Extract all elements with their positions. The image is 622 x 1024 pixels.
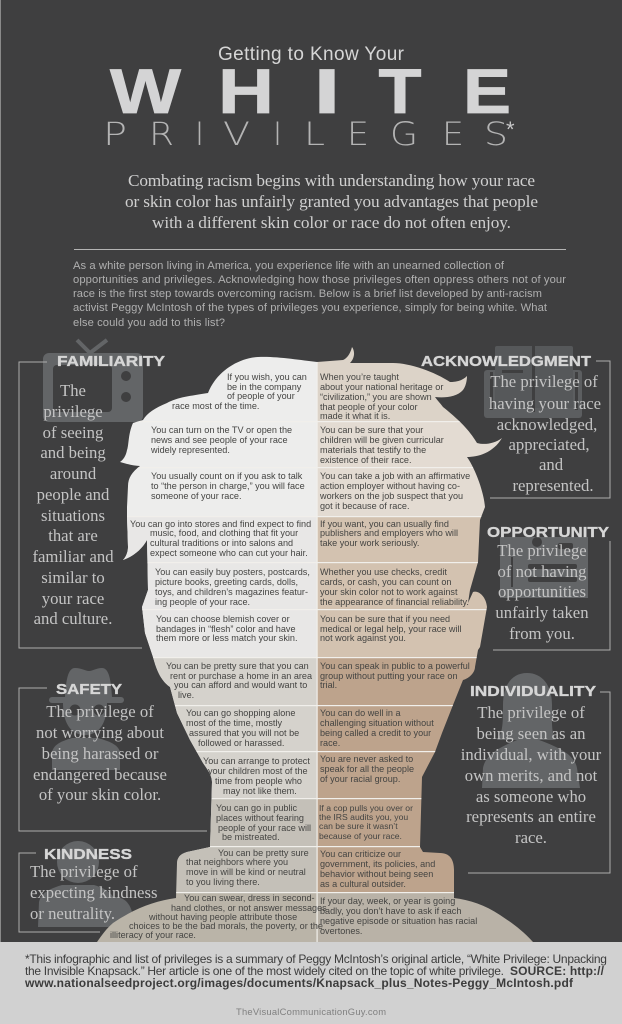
panel: right column privileges: Whether you use checks, credit <box>320 567 447 577</box>
panel: left column privileges: bandages in “flesh” color and have <box>156 624 296 634</box>
panel: opportunity: of not having <box>498 562 587 581</box>
footnote: SOURCE: http:// <box>510 964 605 978</box>
panel: familiarity: situations <box>41 506 105 525</box>
panel: right column privileges: got it because of race. <box>320 501 409 511</box>
footer band <box>0 942 622 1024</box>
title: PRIVILEGES: G <box>390 115 418 153</box>
panel: kindness: The privilege of <box>30 862 138 881</box>
panel: left column privileges: that neighbors where you <box>186 857 288 867</box>
panel: right column privileges: overtones. <box>320 926 362 936</box>
lead statement <box>125 171 538 232</box>
title: PRIVILEGES: V <box>223 115 250 153</box>
panel: acknowledgment: and <box>539 455 564 474</box>
panel: right column privileges: can be sure it wasn’t <box>319 821 398 831</box>
panel: right column privileges: as a cultural outsider. <box>320 879 406 889</box>
panel: individuality: INDIVIDUALITY <box>470 683 596 700</box>
panel: acknowledgment: represented. <box>512 476 594 495</box>
panel: familiarity: your race <box>42 589 104 608</box>
panel: individuality: represents an entire <box>466 807 596 826</box>
panel: opportunity: unfairly taken <box>495 603 589 622</box>
panel: left column privileges: be mistreated. <box>222 832 280 842</box>
panel: left column privileges: You can arrange to protect <box>203 756 310 766</box>
icon: open book <box>484 346 582 418</box>
panel: left column privileges: If you wish, you can <box>227 372 307 382</box>
panel: acknowledgment <box>421 353 610 498</box>
panel: left column privileges: You can be pretty sure that you can <box>166 661 309 671</box>
heading: Getting to Know Your: Getting to Know Your <box>218 44 405 65</box>
panel: right column privileges: speak for all the people <box>320 764 414 774</box>
panel: left column privileges: race most of the time. <box>172 401 259 411</box>
panel: left column privileges: your children most of the <box>208 766 308 776</box>
icon: television <box>43 340 143 422</box>
panel: right column privileges: You can take a job with an affirmative <box>320 471 470 481</box>
title: PRIVILEGES: * <box>506 117 515 142</box>
panel: individuality: individual, with your <box>461 745 602 764</box>
panel: right column privileges: take your work seriously. <box>320 538 419 548</box>
panel: familiarity: around <box>50 464 97 483</box>
panel: familiarity: FAMILIARITY <box>57 353 165 370</box>
intro paragraph: activist Peggy McIntosh of the types of privileges you experience, simply for being white. What <box>73 302 548 314</box>
panel: safety: The privilege of <box>46 702 154 721</box>
panel: left column privileges: may not like them. <box>223 786 297 796</box>
panel: left column privileges: ing people of your race. <box>155 597 250 607</box>
panel: left column privileges: news and see people of your race <box>151 435 288 445</box>
panel: individuality: The privilege of <box>477 703 585 722</box>
panel: left column privileges: rent or purchase a home in an area <box>170 671 313 681</box>
panel: right column privileges: You can be sure that if you need <box>320 614 450 624</box>
intro paragraph: opportunities and privileges. Acknowledging how those privileges often oppress others not of your <box>73 274 566 286</box>
credit: TheVisualCommunicationGuy.com <box>236 1006 386 1017</box>
panel: right column privileges: children will be given curricular <box>320 435 444 445</box>
panel: left column privileges: You can go into stores and find expect to find <box>130 519 311 529</box>
panel: safety: of your skin color. <box>39 785 161 804</box>
panel: left column privileges: picture books, greeting cards, dolls, <box>155 577 298 587</box>
panel: safety: being harassed or <box>42 744 159 763</box>
panel: familiarity: and being <box>40 443 106 462</box>
panel: right column privileges: negative episode or situation has racial <box>320 916 477 926</box>
panel: right column privileges: You can criticize our <box>320 849 401 859</box>
panel: right column privileges: group without putting your race on <box>320 671 458 681</box>
panel: left column privileges: You can be pretty sure <box>218 848 309 858</box>
panel: right column privileges: publishers and employers who will <box>320 528 458 538</box>
icon: woman <box>482 673 580 788</box>
panel: right column privileges: the appearance of financial reliability. <box>320 597 469 607</box>
panel: familiarity <box>19 353 165 648</box>
panel: right column privileges: behavior without being seen <box>320 869 433 879</box>
panel: right column privileges: materials that testify to the <box>320 445 426 455</box>
footnote: *This infographic and list of privileges is a summary of Peggy McIntosh’s original article, “White Privilege: Unpacking <box>25 952 607 966</box>
panel: left column privileges: to “the person in charge,” you will face <box>151 481 305 491</box>
panel: left column privileges: you can afford and would want to <box>174 680 307 690</box>
intro paragraph: race is the first step towards overcoming racism. Below is a brief list developed by anti-racism <box>73 288 542 300</box>
title: WHITE: H <box>218 57 274 127</box>
title: PRIVILEGES: R <box>149 115 174 153</box>
panel: individuality: as someone who <box>476 787 586 806</box>
divider <box>74 249 566 250</box>
panel: left column privileges: toys, and children’s magazines featur- <box>155 587 308 597</box>
lead statement: with a different skin color or race do not often enjoy. <box>152 213 511 232</box>
panel: left column privileges: most of the time, mostly <box>186 718 282 728</box>
panel: kindness <box>19 846 157 932</box>
panel: right column privileges: If you want, you can usually find <box>320 519 449 529</box>
panel: left column privileges: You usually count on if you ask to talk <box>151 471 303 481</box>
panel: left column privileges: widely represented. <box>150 445 230 455</box>
panel: left column privileges: people of your race will <box>218 823 311 833</box>
panel: left column privileges: them more or less match your skin. <box>156 633 298 643</box>
panel: left column privileges: hand clothes, or not answer messages <box>171 903 327 913</box>
title: WHITE: W <box>110 57 182 127</box>
panel: familiarity: The <box>60 381 86 400</box>
title: PRIVILEGES: I <box>273 115 282 153</box>
silhouette: head and shoulders bands <box>90 340 550 942</box>
panel: right column privileges: race. <box>320 738 340 748</box>
panel: left column privileges: to you living there. <box>186 877 260 887</box>
title: PRIVILEGES: I <box>195 115 204 153</box>
panel: individuality: own merits, and not <box>465 766 598 785</box>
panel: familiarity: of seeing <box>43 423 104 442</box>
panel: safety <box>19 681 207 831</box>
panel: safety: endangered because <box>33 765 167 784</box>
panel: safety: not worrying about <box>36 723 164 742</box>
panel: left column privileges: move in will be kind or neutral <box>186 867 306 877</box>
panel: kindness: or neutrality. <box>30 904 115 923</box>
panel: left column privileges: someone of your race. <box>151 491 241 501</box>
title: WHITE: E <box>463 57 511 127</box>
panel: right column privileges: workers on the job suspect that you <box>319 491 463 501</box>
panel: right column privileges: not work against you. <box>320 633 406 643</box>
panel: right column privileges: made it what it is. <box>320 411 390 421</box>
lead statement: or skin color has unfairly granted you advantages that people <box>125 192 538 211</box>
panel: acknowledgment: The privilege of <box>490 372 598 391</box>
panel: right column privileges: because of your race. <box>319 831 402 841</box>
title: WHITE: T <box>378 57 422 127</box>
title: PRIVILEGES: E <box>442 115 464 153</box>
panel: right column privileges: government, its policies, and <box>320 859 435 869</box>
lead statement: Combating racism begins with understanding how your race <box>128 171 535 190</box>
panel: opportunity: OPPORTUNITY <box>487 524 609 541</box>
panel: left column privileges: You can easily buy posters, postcards, <box>155 567 310 577</box>
panel: familiarity: similar to <box>41 568 105 587</box>
panel: individuality: race. <box>515 828 547 847</box>
title: WHITE <box>110 57 511 127</box>
panel: opportunity <box>487 524 610 650</box>
panel: left column privileges: You can swear, dress in second- <box>184 893 315 903</box>
panel: kindness: KINDNESS <box>44 846 132 863</box>
intro paragraph: As a white person living in America, you experience life with an unearned collection of <box>73 260 505 272</box>
icon: man in hat <box>49 668 124 770</box>
panel: acknowledgment: acknowledged, <box>497 415 597 434</box>
panel: right column privileges: of your racial group. <box>320 774 400 784</box>
panel: left column privileges: without having people attribute those <box>148 912 297 922</box>
panel: opportunity: opportunities <box>498 582 586 601</box>
panel: familiarity: and culture. <box>34 609 112 628</box>
title: PRIVILEGES: S <box>484 115 508 153</box>
panel: familiarity: familiar and <box>32 547 114 566</box>
panel: left column privileges: places without fearing <box>216 813 304 823</box>
title: WHITE: I <box>314 57 340 127</box>
panel: right column privileges: “civilization,” you are shown <box>320 392 432 402</box>
panel: safety: SAFETY <box>56 681 122 698</box>
panel: left column privileges: illiteracy of your race. <box>110 930 196 940</box>
panel: left column privileges: of people of your <box>227 391 295 401</box>
panel: right column privileges: You are never asked to <box>320 754 413 764</box>
panel: right column privileges: medical or legal help, your race will <box>320 624 462 634</box>
panel: right column privileges <box>319 372 477 936</box>
panel: left column privileges: You can go in public <box>216 803 298 813</box>
panel: right column privileges: badly, you don’t have to ask if each <box>320 906 461 916</box>
panel: acknowledgment: ACKNOWLEDGMENT <box>421 353 591 370</box>
panel: acknowledgment: appreciated, <box>508 435 590 454</box>
intro paragraph <box>73 260 566 329</box>
panel: left column privileges: expect someone who can cut your hair. <box>150 548 308 558</box>
panel: left column privileges: assured that you will not be <box>189 728 299 738</box>
title: PRIVILEGES: E <box>347 115 369 153</box>
panel: familiarity: privilege <box>43 402 103 421</box>
panel: left column privileges: followed or harassed. <box>198 738 284 748</box>
footnote: the Invisible Knapsack.” Her article is one of the most widely cited on the topic of white privilege. <box>25 964 504 978</box>
panel: right column privileges: You can do well in a <box>320 708 401 718</box>
panel: right column privileges: challenging situation without <box>320 718 434 728</box>
panel: acknowledgment: having your race <box>489 394 601 413</box>
panel: right column privileges: You can be sure that your <box>320 425 423 435</box>
panel: right column privileges: existence of their race. <box>320 455 412 465</box>
panel: right column privileges: cards, or cash, you can count on <box>320 577 451 587</box>
footnote <box>24 952 607 990</box>
panel: left column privileges: be in the company <box>227 382 302 392</box>
icon: person <box>38 841 133 927</box>
panel: individuality: being seen as an <box>477 724 586 743</box>
panel: right column privileges: action employer without having co- <box>320 481 460 491</box>
panel: kindness: expecting kindness <box>30 883 157 902</box>
panel: opportunity: from you. <box>509 624 575 643</box>
panel: right column privileges: If a cop pulls you over or <box>319 803 413 813</box>
panel: left column privileges: music, food, and clothing that fit your <box>150 528 298 538</box>
panel: familiarity: people and <box>37 485 110 504</box>
panel: left column privileges: You can choose blemish cover or <box>156 614 290 624</box>
panel: right column privileges: being called a credit to your <box>320 728 431 738</box>
panel: left column privileges: You can turn on the TV or open the <box>151 425 292 435</box>
panel: familiarity: that are <box>48 526 98 545</box>
panel: right column privileges: If your day, week, or year is going <box>320 896 455 906</box>
panel: left column privileges: You can go shopping alone <box>186 708 295 718</box>
icon: opportunity sheet <box>500 537 588 598</box>
title: PRIVILEGES <box>103 115 515 153</box>
footnote: www.nationalseedproject.org/images/documents/Knapsack_plus_Notes-Peggy_McIntosh.pdf <box>24 976 574 990</box>
panel: left column privileges <box>110 372 327 940</box>
panel: left column privileges: choices to be the bad morals, the poverty, or the <box>129 921 323 931</box>
title: PRIVILEGES: L <box>304 115 325 153</box>
panel: left column privileges: live. <box>178 690 194 700</box>
panel: right column privileges: When you’re taught <box>320 372 399 382</box>
panel: individuality <box>461 683 610 873</box>
panel: right column privileges: that people of your color <box>320 402 418 412</box>
panel: right column privileges: trial. <box>320 680 337 690</box>
panel: right column privileges: the IRS audits you, you <box>319 812 408 822</box>
panel: right column privileges: about your national heritage or <box>320 382 443 392</box>
panel: opportunity: The privilege <box>497 541 587 560</box>
title: PRIVILEGES: P <box>103 115 127 153</box>
intro paragraph: else could you add to this list? <box>73 317 225 329</box>
panel: right column privileges: your skin color not to work against <box>320 587 458 597</box>
panel: left column privileges: time from people who <box>215 776 302 786</box>
panel: right column privileges: You can speak in public to a powerful <box>320 661 470 671</box>
left edge strip <box>0 0 1 942</box>
panel: left column privileges: cultural traditions or into salons and <box>150 538 293 548</box>
